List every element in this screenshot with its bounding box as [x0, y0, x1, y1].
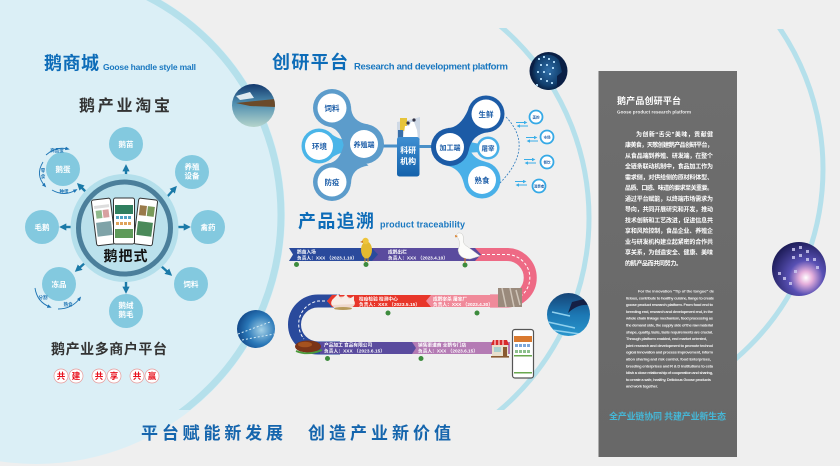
road labels: 负责人：XXX （2023.6.15） — [418, 348, 478, 354]
category bubbles: 设备 — [184, 170, 200, 180]
photo: slaughter line — [498, 288, 522, 307]
English description: goose product research platform. From food end to — [626, 302, 714, 307]
heading: goose mall: 鹅商城 — [44, 52, 99, 74]
English description: Through platform enabled, end market oriented, — [626, 336, 707, 341]
slogan badges — [54, 369, 159, 383]
icon: duckling — [360, 238, 372, 262]
R&D network: processing side: 生鲜 — [478, 109, 494, 119]
icon: shop — [491, 340, 509, 358]
English description: For the innovation “Tip of the tongue” de — [638, 288, 715, 294]
R&D network: breeding side: 养殖端 — [354, 140, 374, 149]
road labels: 产品加工 食品有限公司 — [324, 342, 372, 348]
R&D network: processing side — [419, 96, 504, 198]
R&D network: breeding side — [302, 89, 398, 201]
English description: ogical innovation and process improvement, inform — [626, 350, 713, 355]
heading: product traceability — [298, 210, 465, 232]
road labels: 鹅苗入场 — [297, 248, 316, 256]
heading: product traceability: 产品追溯 — [298, 210, 374, 232]
Chinese description: 全链条联动机制中，食品加工作为 — [625, 163, 713, 171]
curved sub-labels: 食 — [41, 173, 46, 180]
curved sub-labels: 熟食 — [64, 301, 73, 308]
Chinese description: 享关系，为创造安全、健康、美味 — [625, 249, 713, 257]
panel slogan: 全产业链协同 共建产业新生态 — [609, 410, 726, 422]
dashed link and market nodes: 美的 — [532, 114, 540, 119]
icon: roast goose — [295, 340, 322, 353]
bottom slogan — [141, 423, 451, 443]
Chinese description: 品质、口感、味道的要求至关重要。 — [625, 184, 713, 192]
curved sub-labels: 零 — [41, 167, 46, 174]
road labels: 成鹅宰杀 屠宰厂 — [433, 296, 467, 302]
category bubbles: 冻品 — [52, 279, 66, 289]
road labels — [297, 248, 493, 354]
English description: to create a safe, healthy, Delicious Goose products — [626, 377, 712, 382]
R&D network: breeding side: 环境 — [312, 141, 327, 151]
curved sub-labels: 商品蛋 — [50, 147, 64, 154]
road labels: 成鹅出栏 — [388, 248, 407, 256]
English description: breeding enterprises and R & D institutions to esta — [626, 363, 714, 368]
English description: shape, quality, taste, taste requirements are crucial. — [626, 329, 713, 334]
English description: breeding end, research and development end, in the — [626, 309, 714, 314]
timeline dots — [294, 262, 480, 361]
R&D network: processing side: 屠宰 — [482, 144, 495, 152]
R&D network: processing side: 加工端 — [440, 143, 460, 152]
heading: goose mall: Goose handle style mall — [103, 62, 196, 72]
panel: platform description — [598, 71, 737, 457]
subheading: goose industry taobao: 鹅产业淘宝 — [79, 96, 170, 115]
heading: product traceability: product traceability — [380, 220, 465, 230]
slogan badges: 共 — [133, 371, 142, 381]
hub label: 鹅把式 — [104, 248, 148, 264]
panel heading — [617, 95, 691, 114]
icon: white goose — [455, 233, 480, 263]
category bubbles — [25, 127, 225, 328]
Chinese description: 从食品端到养殖、研发端，在整个 — [625, 152, 713, 160]
central hub circle — [70, 174, 178, 282]
category bubbles: 毛鹅 — [34, 222, 50, 232]
category bubbles: 饲料 — [184, 279, 199, 289]
Chinese description: 技术创新和工艺改进，促进信息共 — [625, 216, 713, 224]
R&D network: breeding side: 饲料 — [324, 103, 340, 113]
Chinese description — [625, 130, 713, 268]
bottom slogan: 平台赋能新发展 — [141, 423, 283, 443]
slogan badges: 共 — [95, 371, 104, 381]
heading: goose mall — [44, 52, 196, 74]
middle arc — [496, 28, 592, 410]
Chinese description: 的鹅产品而共同努力。 — [625, 260, 682, 268]
Chinese description: 康美食，天歌创建鹅产品创研平台， — [625, 141, 713, 149]
category bubbles: 鹅绒 — [118, 300, 134, 310]
bottom slogan: 创造产业新价值 — [308, 423, 451, 443]
slogan badges: 共 — [57, 371, 66, 381]
English description: and work together. — [626, 384, 658, 389]
road labels: 负责人：XXX （2023.5.15） — [359, 301, 420, 308]
road labels: 销售渠道商 全鹅专门店 — [418, 342, 466, 348]
Chinese description: 需求侧，对供给侧的原材料体型、 — [625, 174, 713, 182]
road labels: 检疫检验 检测中心 — [359, 296, 398, 302]
English description: ation sharing and risk control, food Enterprises, — [626, 356, 711, 362]
dashed link and market nodes — [500, 110, 554, 192]
Chinese description: 为创新“舌尖”美味，贡献健 — [636, 130, 713, 138]
category bubbles: 禽药 — [200, 222, 216, 232]
slogan badges: 享 — [110, 371, 119, 381]
R&D network: breeding side: 防疫 — [324, 177, 340, 187]
dashed link and market nodes: 市场 — [544, 134, 551, 139]
image bubble: water — [237, 310, 275, 348]
category bubbles: 鹅蛋 — [56, 164, 71, 174]
category bubbles: 鹅毛 — [118, 309, 134, 319]
heading: R&D platform — [272, 52, 508, 72]
slogan badges: 赢 — [148, 371, 157, 381]
English description: licious, contribute to healthy cuisine, tiange to create — [626, 295, 715, 300]
icon: raw poultry — [331, 294, 355, 310]
image bubble: digital palm — [772, 242, 826, 296]
road labels: 负责人：XXX （2023.6.15） — [324, 348, 385, 354]
English description: the demand side, the supply side of the raw material — [626, 322, 713, 328]
image bubble: digital head — [530, 52, 568, 90]
panel heading: Goose product research platform — [617, 110, 691, 114]
icon: phone with shop app — [512, 330, 534, 378]
image bubble: data hand — [547, 293, 590, 336]
heading: R&D platform: Research and development platform — [354, 62, 508, 72]
category bubbles: 养殖 — [184, 162, 200, 172]
English description: whole chain linkage mechanism, food processing as — [625, 316, 714, 321]
panel heading: 鹅产品创研平台 — [617, 95, 681, 106]
research institute box: 机构 — [400, 156, 416, 166]
traceability road — [289, 248, 530, 361]
hub diagram — [25, 127, 225, 328]
R&D network: processing side: 熟食 — [474, 175, 490, 185]
research institute box — [397, 117, 420, 176]
research institute box: 科研 — [400, 145, 416, 155]
Chinese description: 业与研发机构建立起紧密的合作共 — [625, 238, 713, 246]
image bubble: earth — [232, 84, 275, 127]
subheading: multi-merchant platform: 鹅产业多商户平台 — [51, 341, 167, 357]
curved sub-labels: 种蛋 — [60, 188, 69, 195]
large left circle background — [0, 0, 285, 464]
Chinese description: 导向，共同开展研究和开发，推动 — [625, 206, 713, 214]
Chinese description: 通过平台赋能，以终端市场需求为 — [625, 195, 713, 203]
dashed link and market nodes: 餐饮 — [544, 159, 551, 164]
slogan badges: 建 — [72, 371, 81, 381]
Chinese description: 享和风险控制，食品企业、养殖企 — [625, 227, 713, 235]
curved sub-labels — [35, 147, 80, 309]
hub arrows — [62, 167, 188, 291]
dashed link and market nodes: 消费者 — [534, 183, 545, 188]
curved sub-labels: 分割 — [38, 294, 48, 301]
road labels: 负责人：XXX （2023.1.10） — [297, 254, 357, 261]
English description — [625, 288, 715, 389]
category bubbles: 鹅苗 — [118, 139, 134, 149]
app phones — [91, 198, 158, 246]
heading: R&D platform: 创研平台 — [272, 52, 348, 72]
road labels: 负责人：XXX （2023.4.30） — [433, 301, 493, 308]
English description: joint research and development to promote technol — [625, 343, 713, 348]
road labels: 负责人：XXX （2023.4.10） — [388, 254, 448, 261]
right arc — [737, 29, 826, 361]
English description: blish a close relationship of cooperation and sharing, — [626, 370, 713, 375]
